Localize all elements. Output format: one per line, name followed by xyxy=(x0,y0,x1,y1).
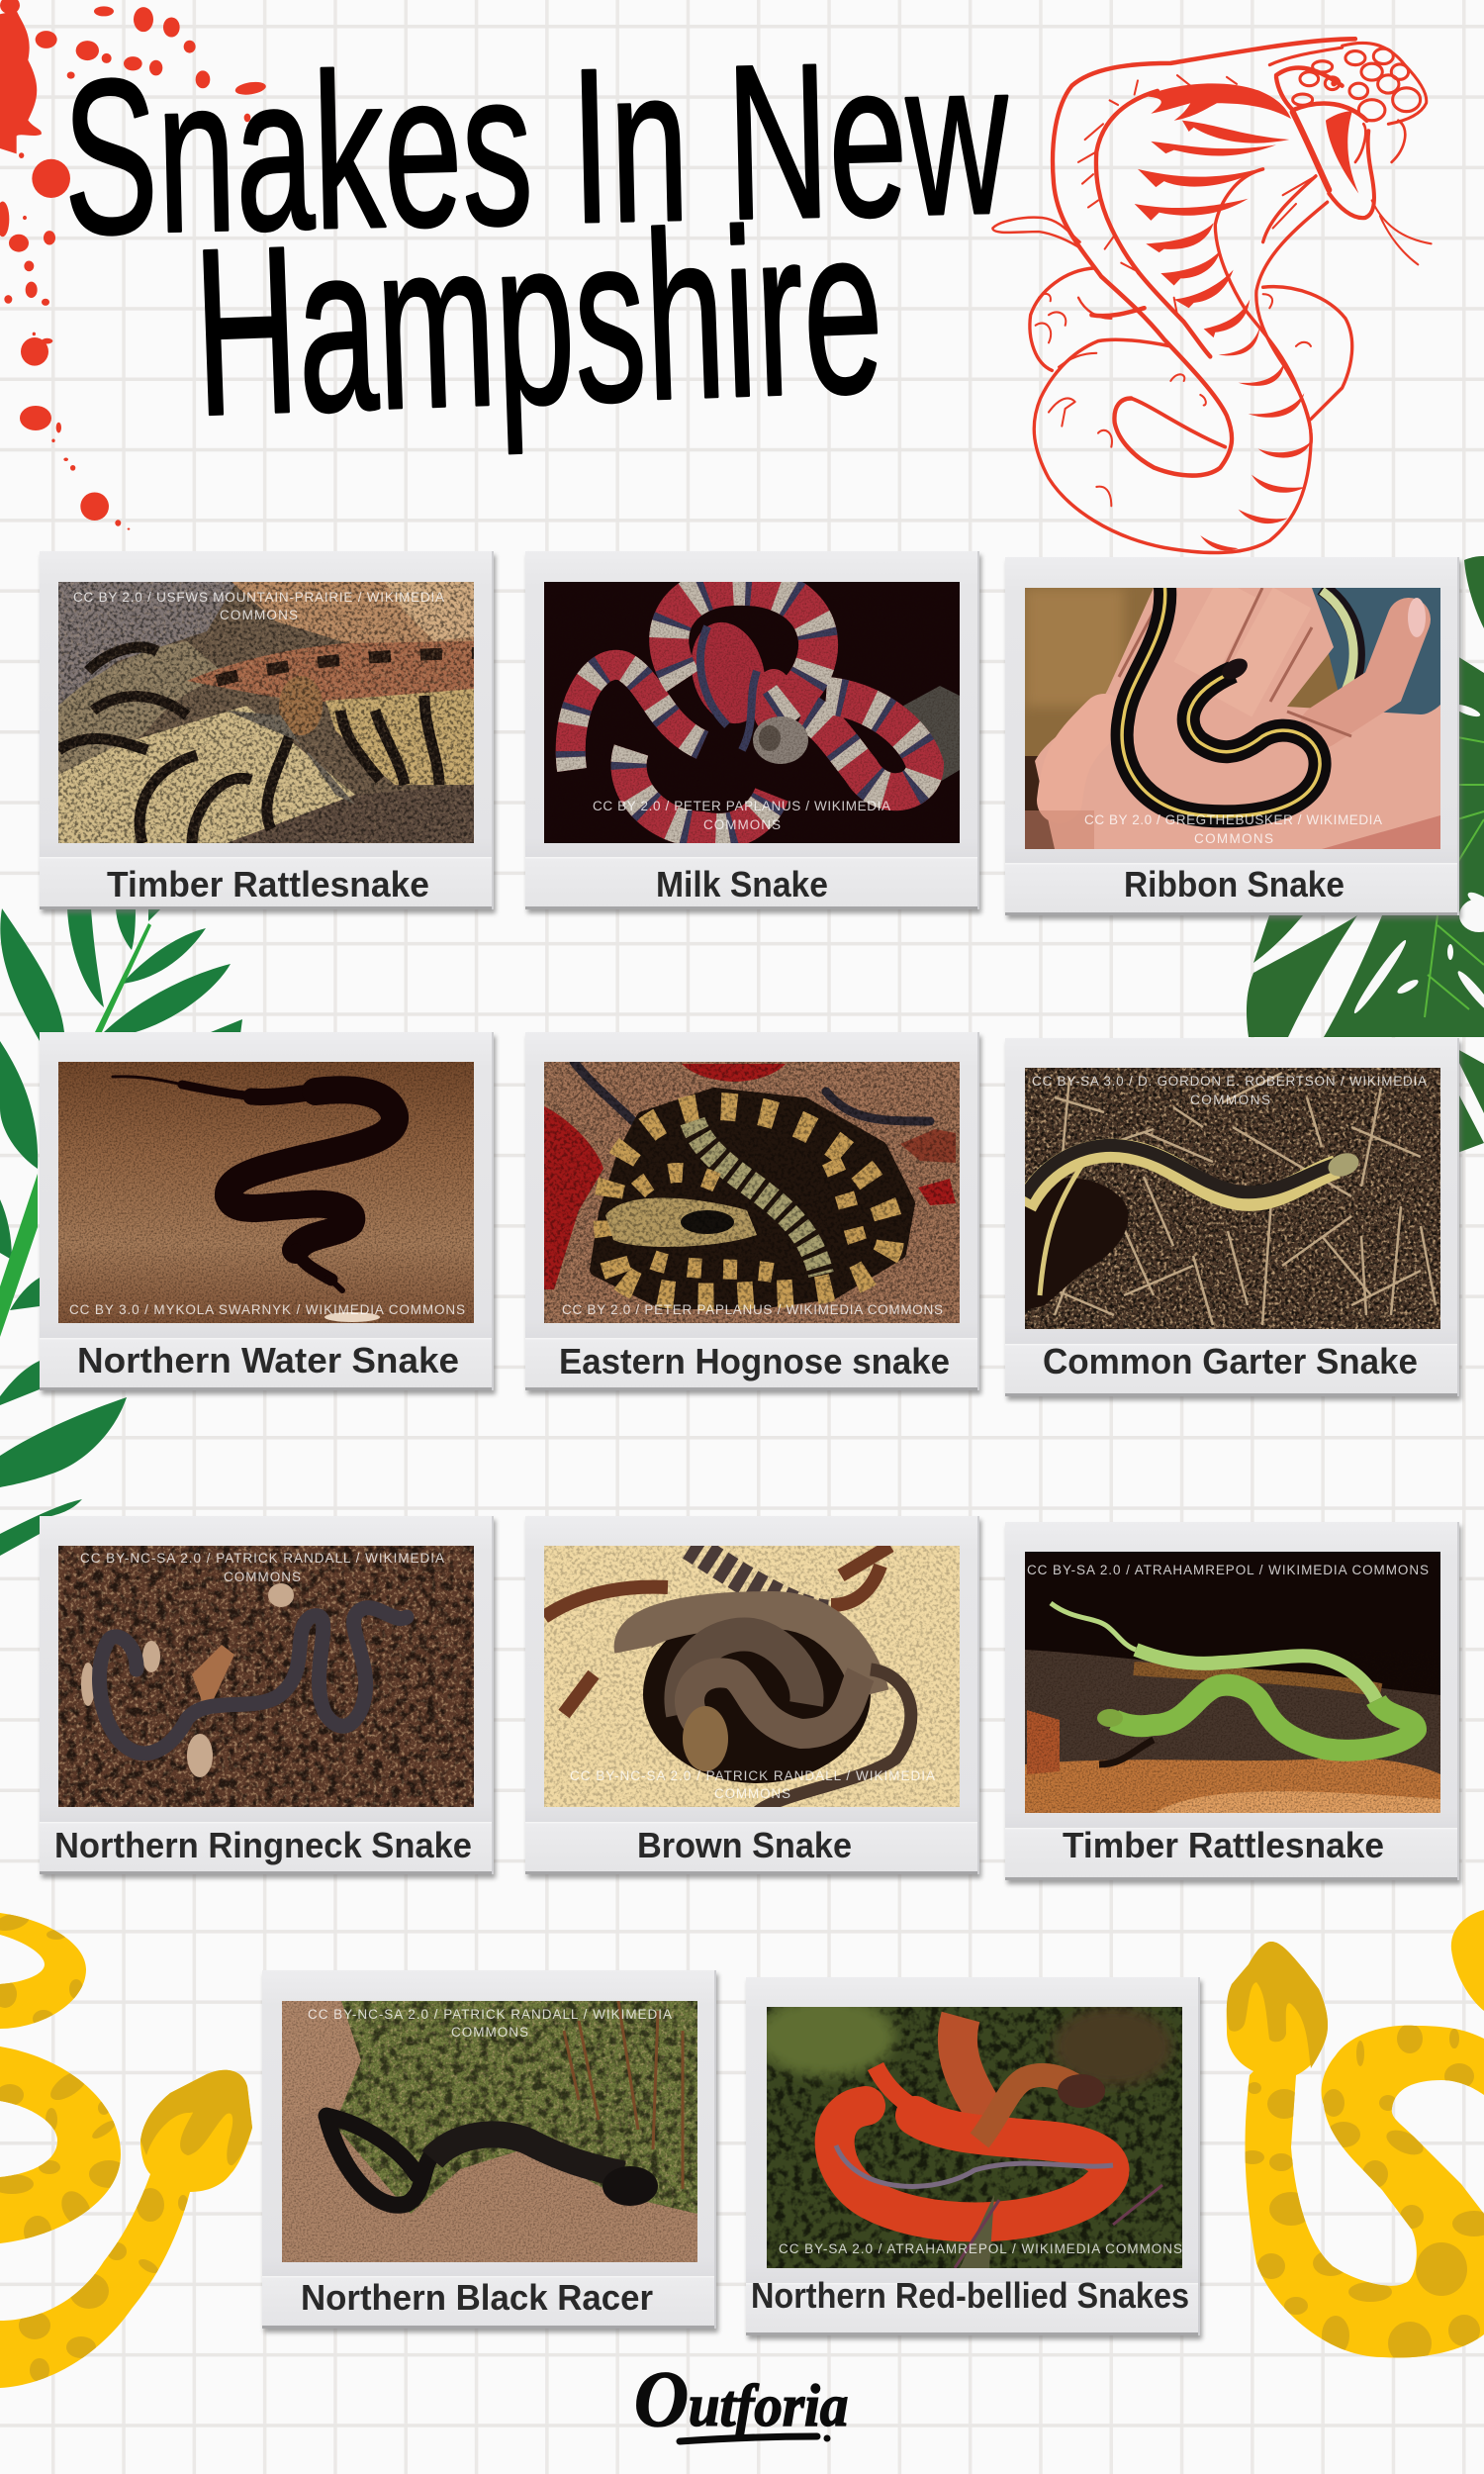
photo credit xyxy=(73,590,444,622)
photo credit: COMMONS xyxy=(714,1786,790,1801)
photo credit: CC BY-NC-SA 2.0 / PATRICK RANDALL / WIKIMEDIA xyxy=(308,2007,672,2022)
card: Common Garter Snake xyxy=(1005,1038,1461,1400)
cobra hood thick band xyxy=(1145,83,1291,121)
photo credit xyxy=(593,799,890,832)
card: Eastern Hognose snake xyxy=(525,1032,981,1394)
photo credit xyxy=(1032,1074,1427,1107)
title xyxy=(60,14,1011,465)
photo credit: CC BY-SA 3.0 / D. GORDON E. ROBERTSON / WIKIMEDIA xyxy=(1032,1074,1427,1089)
photo credit: CC BY 2.0 / USFWS MOUNTAIN-PRAIRIE / WIKIMEDIA xyxy=(73,590,444,605)
logo: Outforia: Outforia xyxy=(634,2354,848,2442)
caption: Common Garter Snake xyxy=(1043,1341,1418,1381)
card: Milk Snake xyxy=(525,551,981,913)
card: Brown Snake xyxy=(525,1516,981,1878)
photo credit: COMMONS xyxy=(703,817,781,832)
photo credit xyxy=(80,1551,444,1584)
caption: Brown Snake xyxy=(637,1825,852,1865)
card: Northern Ringneck Snake xyxy=(40,1516,496,1878)
photo credit xyxy=(1084,812,1382,846)
card: Northern Red-bellied Snakes xyxy=(746,1977,1202,2339)
card: Ribbon Snake xyxy=(1005,557,1461,919)
photo: water snake on sand xyxy=(58,1062,474,1323)
caption: Timber Rattlesnake xyxy=(107,864,429,904)
card: Timber Rattlesnake (green snake photo) xyxy=(1005,1522,1461,1884)
title: Hampshire xyxy=(190,176,886,465)
photo: black racer on rock xyxy=(282,2001,697,2262)
caption: Milk Snake xyxy=(656,864,828,904)
photo credit: CC BY 2.0 / PETER PAPLANUS / WIKIMEDIA xyxy=(593,799,890,813)
card: Timber Rattlesnake xyxy=(40,551,496,913)
photo: ribbon snake in hand xyxy=(1025,588,1440,849)
photo credit: CC BY-NC-SA 2.0 / PATRICK RANDALL / WIKIMEDIA xyxy=(80,1551,444,1566)
caption: Timber Rattlesnake xyxy=(1063,1825,1384,1865)
icon: yellow snake right xyxy=(1227,1910,1484,2365)
photo: milk snake xyxy=(544,582,960,843)
photo: timber rattlesnake coils xyxy=(58,582,474,843)
caption: Northern Red-bellied Snakes xyxy=(751,2275,1189,2316)
photo: garter snake on forest floor xyxy=(1025,1068,1440,1329)
caption: Northern Water Snake xyxy=(77,1340,459,1380)
photo credit: COMMONS xyxy=(451,2025,528,2040)
icon: red paint splatter xyxy=(0,0,268,530)
photo credit xyxy=(308,2007,672,2040)
icon: yellow snake left xyxy=(0,1910,252,2388)
photo: ringneck snake on leaf litter xyxy=(58,1546,474,1807)
icon: right monstera leaf xyxy=(1247,556,1484,1153)
photo: brown snake on sandy ground xyxy=(544,1546,960,1807)
cobra head and jaws xyxy=(1269,43,1432,264)
cobra hood thorns xyxy=(1078,75,1316,315)
photo: green snake on rock xyxy=(1025,1552,1440,1813)
photo credit: CC BY 2.0 / GREGTHEBUSKER / WIKIMEDIA xyxy=(1084,812,1382,827)
caption: Ribbon Snake xyxy=(1124,864,1345,904)
photo credit: COMMONS xyxy=(1194,831,1273,846)
card: Northern Black Racer xyxy=(262,1970,718,2332)
caption: Northern Black Racer xyxy=(301,2277,653,2318)
caption: Eastern Hognose snake xyxy=(559,1341,950,1381)
cobra belly ribs xyxy=(1135,121,1311,550)
photo credit: CC BY 3.0 / MYKOLA SWARNYK / WIKIMEDIA COMMONS xyxy=(69,1302,465,1317)
photo credit: COMMONS xyxy=(1190,1093,1270,1107)
caption: Northern Ringneck Snake xyxy=(54,1825,472,1865)
photo credit: CC BY-NC-SA 2.0 / PATRICK RANDALL / WIKIMEDIA xyxy=(570,1768,935,1783)
icon: red cobra line drawing xyxy=(992,39,1432,553)
icon: left palm leaves xyxy=(0,908,242,1556)
photo credit: CC BY-SA 2.0 / ATRAHAMREPOL / WIKIMEDIA COMMONS xyxy=(779,2241,1182,2256)
photo credit: COMMONS xyxy=(220,608,298,622)
photo credit: CC BY-SA 2.0 / ATRAHAMREPOL / WIKIMEDIA COMMONS xyxy=(1027,1563,1429,1577)
cobra skin scale marks xyxy=(1036,294,1311,506)
photo credit: CC BY 2.0 / PETER PAPLANUS / WIKIMEDIA COMMONS xyxy=(562,1302,943,1317)
photo: red-bellied snake xyxy=(767,2007,1182,2268)
photo credit xyxy=(570,1768,935,1801)
photo credit: COMMONS xyxy=(224,1570,301,1584)
photo: hognose snake coiled xyxy=(544,1062,960,1323)
card: Northern Water Snake xyxy=(40,1032,496,1394)
